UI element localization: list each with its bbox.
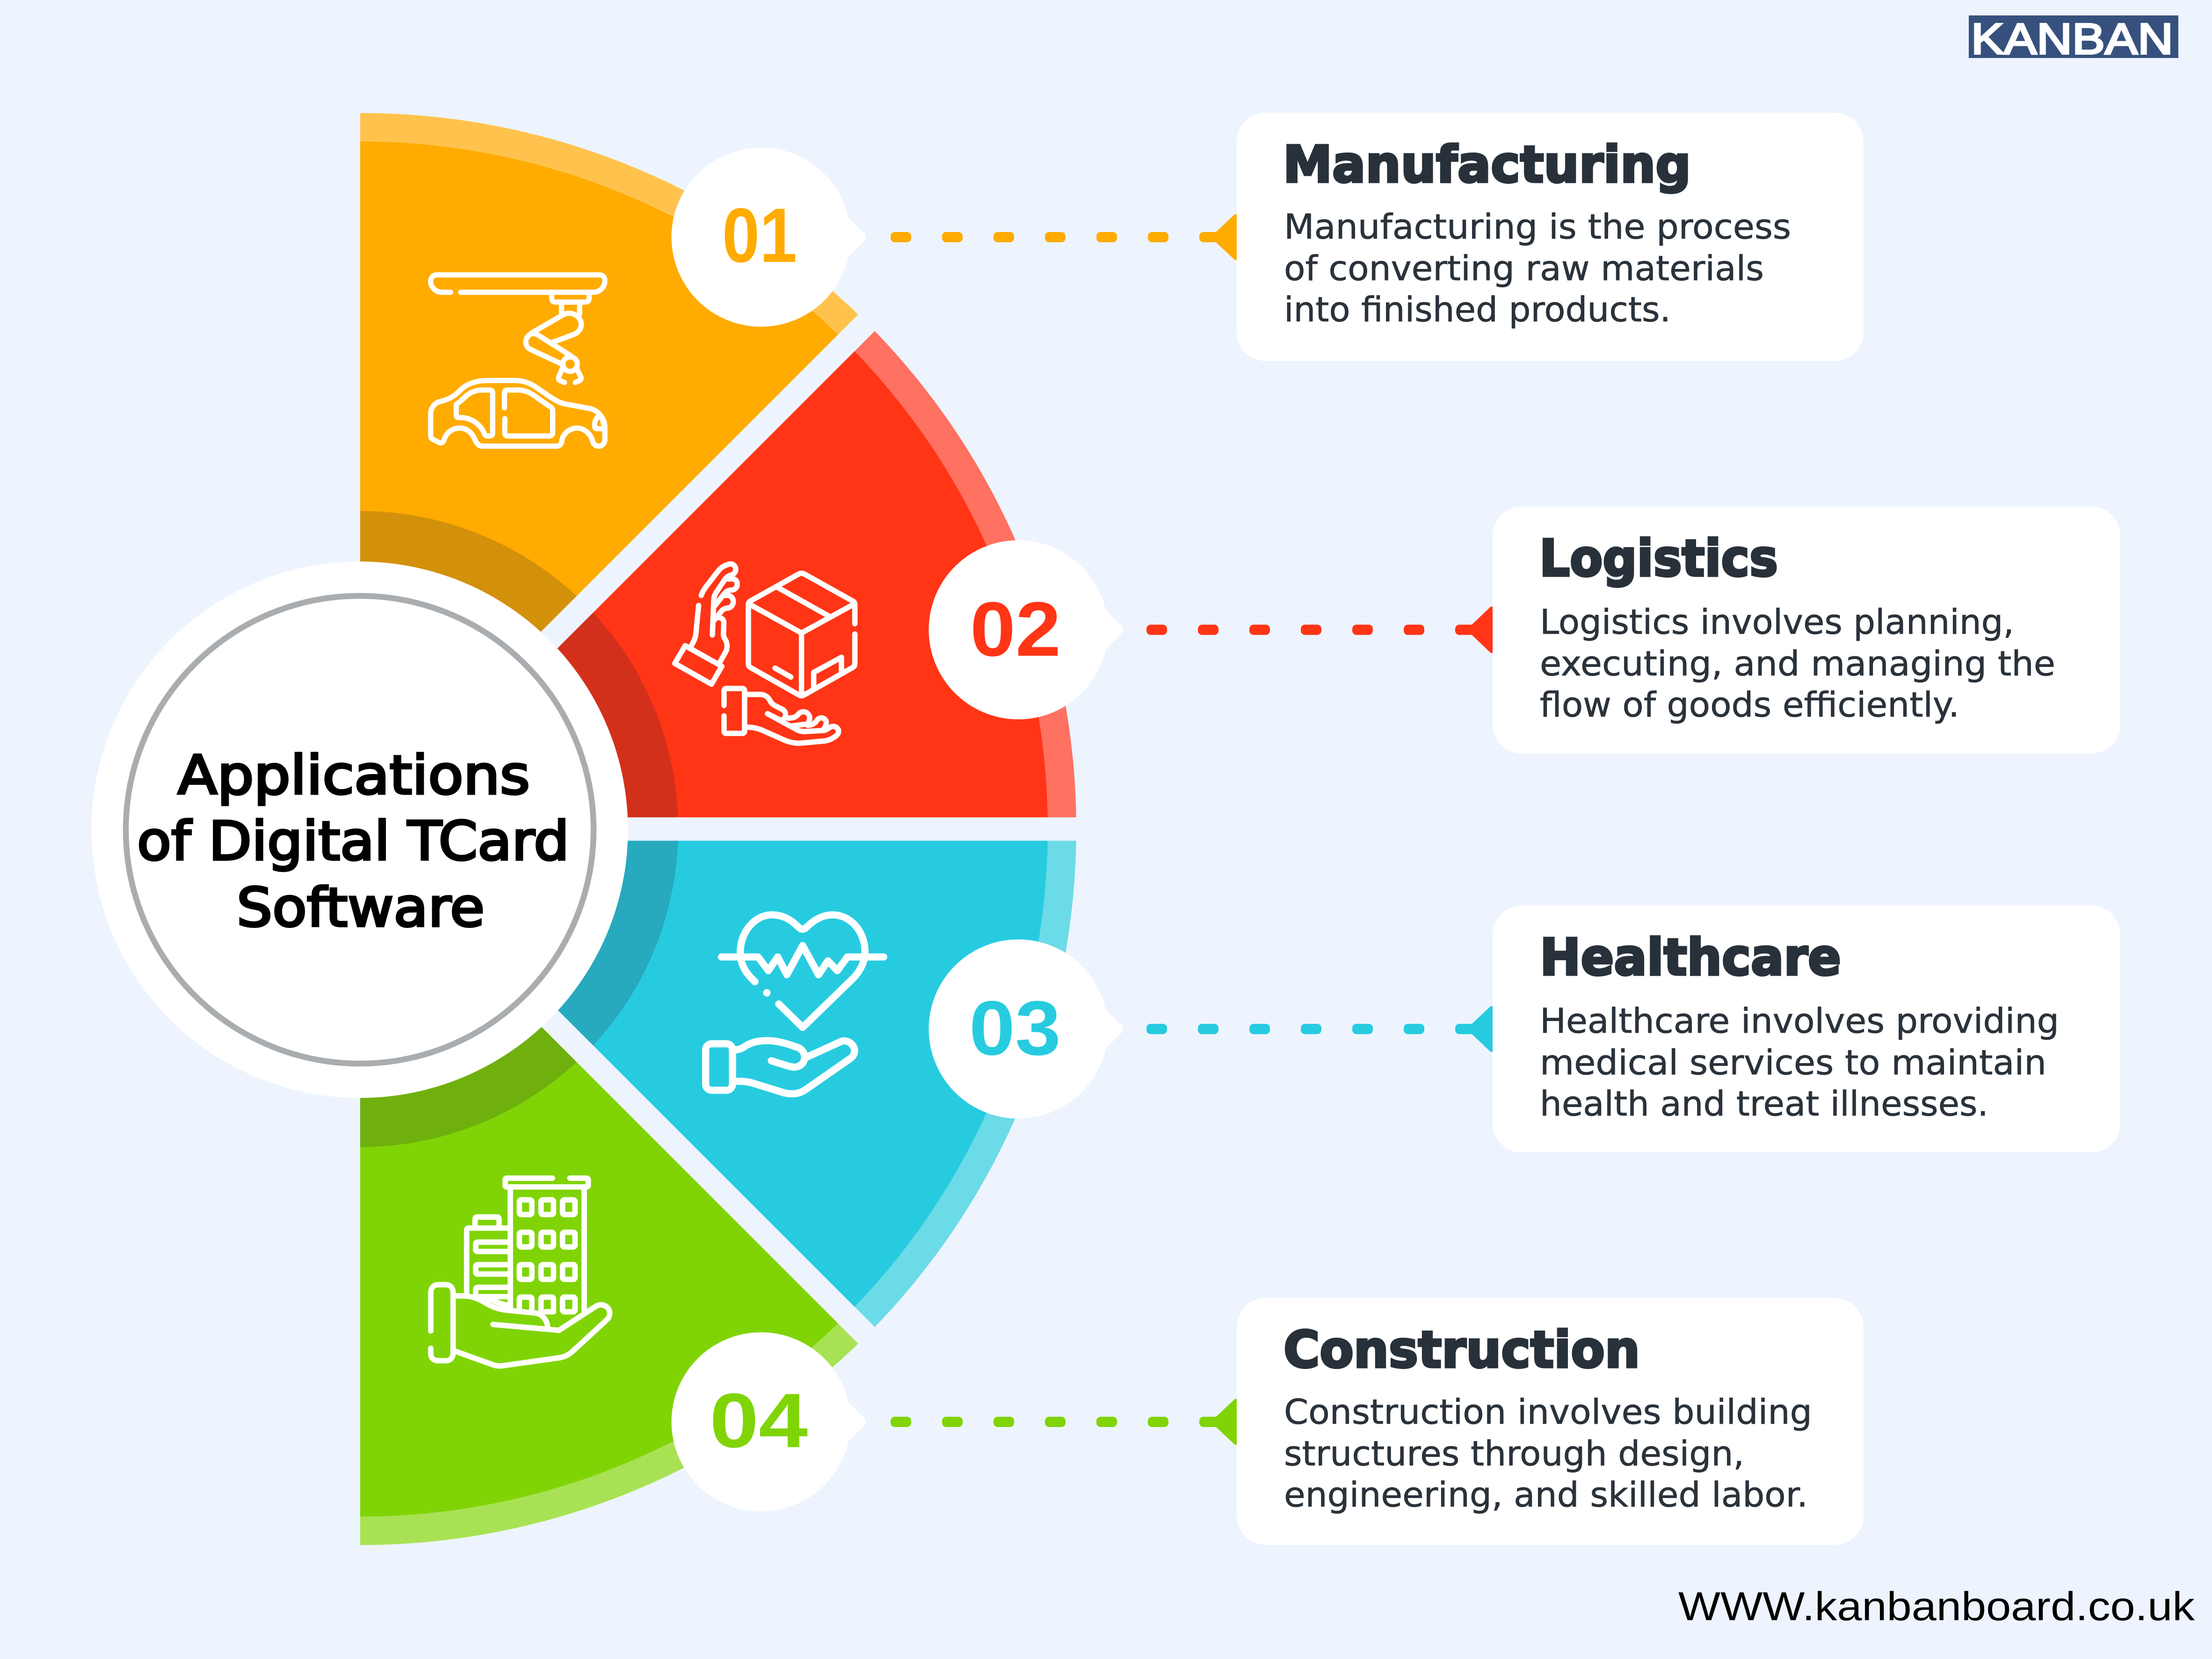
website url: WWW.kanbanboard.co.uk [1678, 1584, 2195, 1629]
icon: robot arm and car [431, 275, 605, 446]
panel: logistics [1493, 507, 2120, 753]
connector 03 [1146, 1006, 1495, 1052]
number badge 04 [672, 1332, 866, 1512]
logo: KANBAN: KANBAN [1971, 14, 2173, 63]
center hub with title [92, 561, 628, 1098]
title [137, 744, 569, 939]
text: logistics description: Logistics involves planning, [1540, 602, 2014, 642]
number badge 02: 02 [970, 586, 1061, 672]
panel: healthcare [1493, 906, 2120, 1152]
number badge 03: 03 [969, 985, 1061, 1071]
text: construction description: structures through design, [1284, 1434, 1744, 1474]
icon: buildings on hand [431, 1178, 610, 1366]
panel: manufacturing [1237, 113, 1864, 361]
title: of Digital TCard [137, 810, 569, 872]
connector 02 [1146, 607, 1495, 653]
icon: heart with pulse over hand [706, 915, 884, 1094]
number badge 02 [929, 540, 1123, 719]
text: manufacturing description: Manufacturing is the process [1284, 207, 1791, 247]
text: construction description: Construction involves building [1284, 1392, 1812, 1432]
connector 01 [891, 214, 1240, 260]
heading: logistics: Logistics [1539, 529, 1778, 588]
text: construction description: engineering, and skilled labor. [1284, 1475, 1808, 1515]
segment: manufacturing wedge [0, 113, 1076, 1545]
segment: logistics wedge [0, 113, 1076, 1545]
number badge 01 [672, 148, 866, 326]
heading: construction: Construction [1284, 1321, 1640, 1379]
number badge 04: 04 [710, 1377, 808, 1463]
number badge 03 [929, 939, 1123, 1119]
segment: construction wedge [0, 113, 1076, 1545]
text: healthcare description: health and treat illnesses. [1540, 1084, 1988, 1124]
text: logistics description: executing, and managing the [1540, 644, 2055, 684]
heading: healthcare: Healthcare [1540, 928, 1841, 987]
text: manufacturing description: of converting raw materials [1284, 249, 1764, 289]
text: construction description [1284, 1392, 1812, 1515]
number badge 01: 01 [722, 192, 797, 278]
title: Applications [178, 744, 530, 806]
text: healthcare description [1540, 1001, 2059, 1124]
text: healthcare description: medical services to maintain [1540, 1043, 2046, 1083]
text: manufacturing description: into finished products. [1284, 290, 1671, 330]
text: healthcare description: Healthcare involves providing [1540, 1001, 2059, 1041]
text: logistics description: flow of goods efficiently. [1540, 685, 1959, 725]
connector 04 [891, 1399, 1240, 1445]
title: Software [237, 877, 485, 939]
heading: manufacturing: Manufacturing [1283, 136, 1691, 194]
segment: healthcare wedge [0, 113, 1076, 1545]
panel: construction [1237, 1298, 1864, 1545]
text: manufacturing description [1284, 207, 1791, 330]
icon: hands and box [675, 564, 855, 743]
text: logistics description [1540, 602, 2055, 725]
